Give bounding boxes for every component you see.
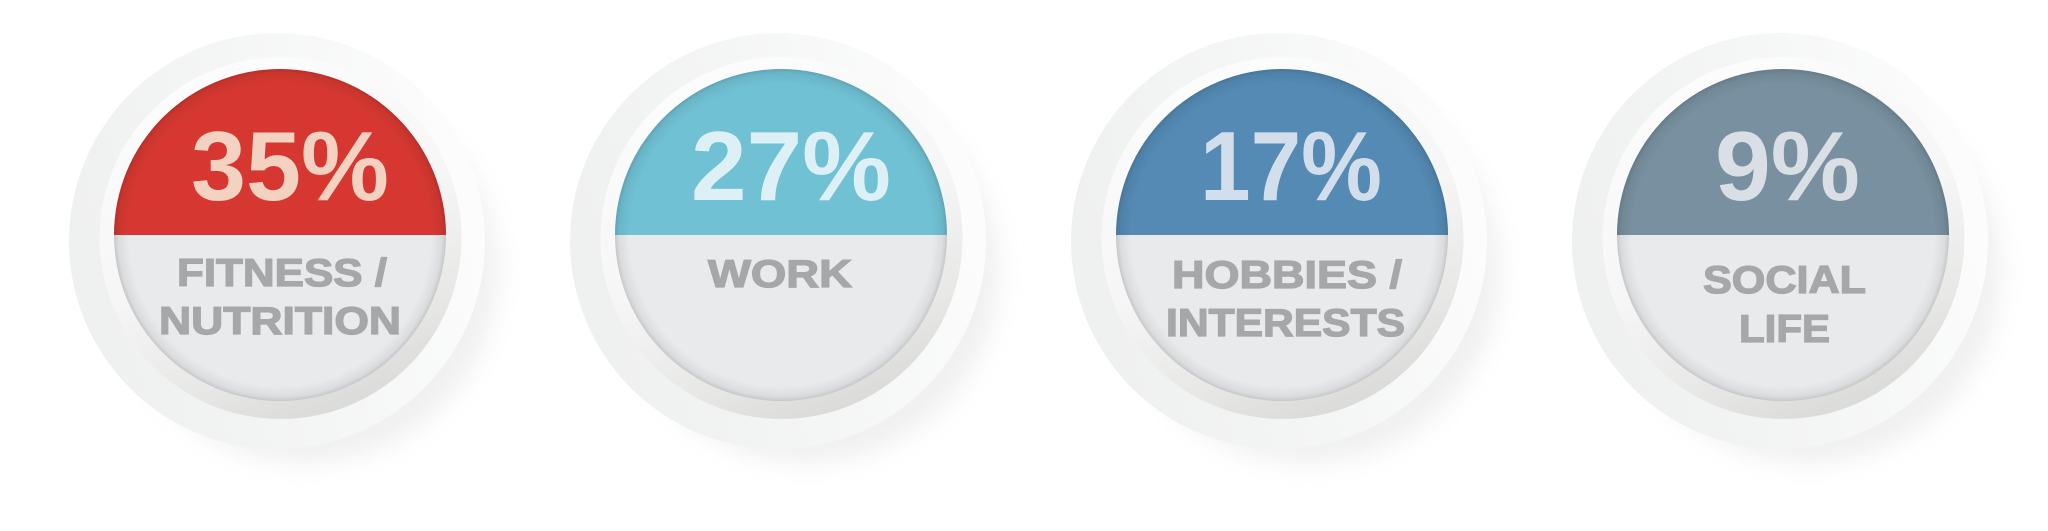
- label line 1: FITNESS /: [177, 252, 387, 295]
- button base: [1572, 33, 2001, 463]
- coloured top half: [1617, 69, 1949, 235]
- percentage: 27%: [691, 111, 891, 221]
- percentage: 17%: [1200, 111, 1382, 221]
- label line 1: HOBBIES /: [1172, 254, 1402, 297]
- panel: hobbies / interests 17%: [1071, 33, 1500, 463]
- label line 2: LIFE: [1739, 308, 1830, 351]
- coloured top half: [1116, 69, 1448, 235]
- inner edge shading: [615, 69, 947, 401]
- percentage: 9%: [1715, 111, 1860, 221]
- button base: [1071, 33, 1500, 463]
- coloured top half: [114, 69, 446, 235]
- label line 2: INTERESTS: [1166, 302, 1405, 345]
- button base: [570, 33, 999, 463]
- coloured top half: [615, 69, 947, 235]
- panel: social life 9%: [1572, 33, 2001, 463]
- label line 2: NUTRITION: [159, 300, 401, 343]
- button base: [69, 33, 498, 463]
- inner edge shading: [1116, 69, 1448, 401]
- panel: work 27%: [570, 33, 999, 463]
- label line 1: SOCIAL: [1703, 259, 1866, 302]
- percentage: 35%: [191, 111, 389, 221]
- inner edge shading: [114, 69, 446, 401]
- inner edge shading: [1617, 69, 1949, 401]
- panel: fitness / nutrition 35%: [69, 33, 498, 463]
- label: WORK: [708, 253, 852, 296]
